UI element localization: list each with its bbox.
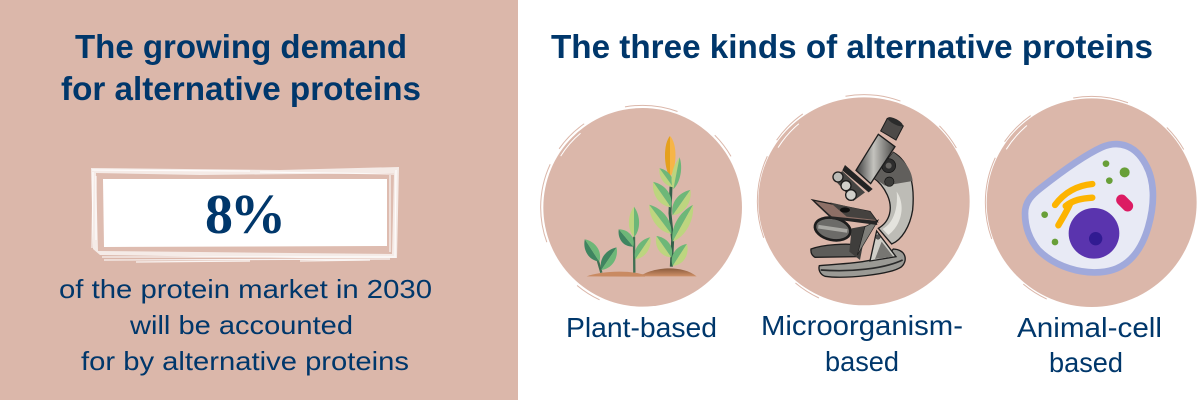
nosepiece	[842, 165, 873, 192]
knobs	[882, 159, 896, 173]
icon: microscope	[757, 95, 971, 308]
golgi	[1055, 184, 1092, 205]
panel: growing demand	[0, 0, 518, 400]
cob	[665, 136, 670, 177]
membrane	[1025, 144, 1153, 272]
heading: growing demand: The growing demand	[75, 28, 407, 65]
callout: 8 percent box	[91, 167, 399, 262]
label: microorganism-based: Microorganism-	[761, 310, 963, 341]
label: animal-cell based: based	[1049, 347, 1123, 378]
stems	[598, 237, 634, 273]
arm	[873, 152, 913, 244]
soil	[587, 272, 645, 277]
label: animal-cell based: Animal-cell	[1017, 312, 1162, 343]
mirror	[813, 214, 853, 243]
label: microorganism-based: based	[825, 346, 899, 377]
tube	[856, 134, 895, 184]
icon: animal cell	[985, 96, 1198, 309]
text block: market share description: for by alternative proteins	[81, 346, 409, 376]
mitochondrion	[1122, 200, 1128, 206]
panel: plant-based	[541, 105, 745, 343]
text block: market share description: of the protein market in 2030	[59, 274, 432, 304]
leaves	[580, 156, 699, 273]
label: microorganism-based	[761, 310, 963, 377]
label: animal-cell based	[1017, 312, 1162, 378]
icon: plant growth	[541, 105, 745, 309]
base	[811, 244, 858, 257]
stand	[849, 226, 867, 260]
stage	[813, 200, 877, 222]
heading: growing demand	[61, 28, 421, 107]
nucleus	[1069, 208, 1119, 259]
text block: market share description: will be accounted	[129, 310, 353, 340]
heading: growing demand: for alternative proteins	[61, 70, 421, 107]
value: 8%: 8%	[205, 184, 283, 246]
granules	[1041, 160, 1130, 245]
label: plant-based: Plant-based	[566, 312, 717, 343]
heading: three kinds: The three kinds of alternative proteins	[551, 28, 1153, 65]
panel: animal-cell-based	[985, 96, 1198, 378]
panel: microorganism-based	[757, 95, 971, 377]
text block: market share description	[59, 274, 432, 376]
